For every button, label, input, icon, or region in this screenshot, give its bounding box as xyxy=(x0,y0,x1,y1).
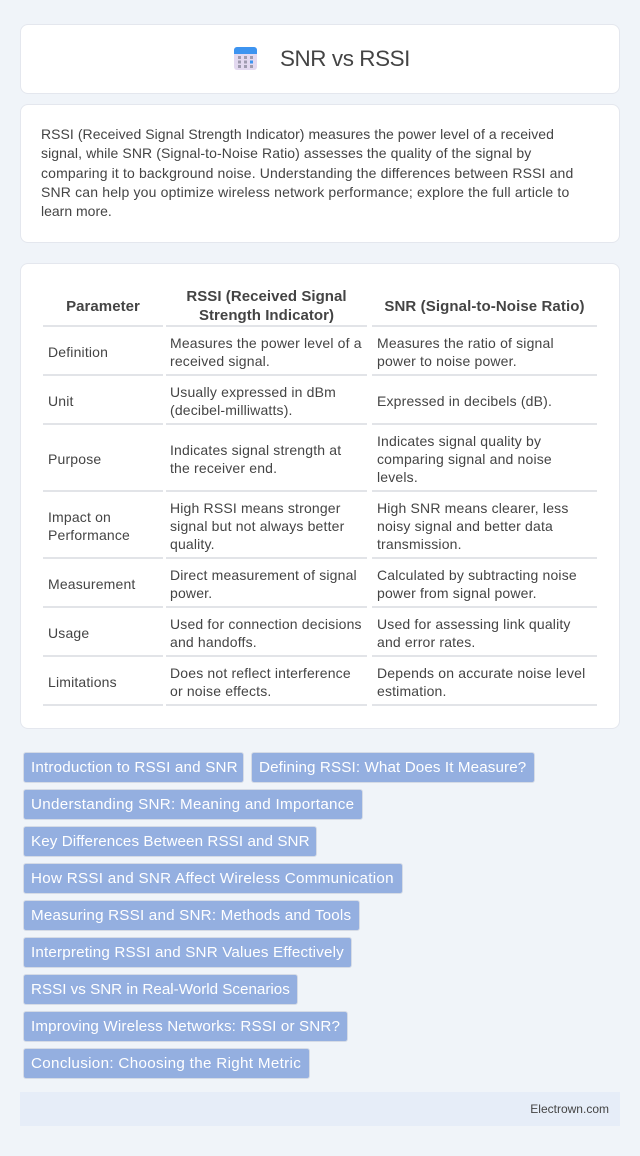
comparison table: Expressed in decibels (dB). xyxy=(377,393,552,409)
comparison table: Limitations xyxy=(48,674,117,690)
header card xyxy=(20,24,620,94)
comparison table: and handoffs. xyxy=(170,634,257,650)
comparison table: High SNR means clearer, less xyxy=(377,500,568,516)
tag: interpreting: Interpreting RSSI and SNR Values Effectively xyxy=(31,944,344,961)
comparison table: Definition xyxy=(48,344,108,360)
intro text: signal, while SNR (Signal-to-Noise Ratio) assesses the quality of the signal by xyxy=(41,145,531,161)
tag: interpreting xyxy=(23,937,352,968)
comparison table: Measures the power level of a xyxy=(170,335,362,351)
intro text xyxy=(41,126,573,219)
comparison table: noisy signal and better data xyxy=(377,518,553,534)
comparison table: SNR (Signal-to-Noise Ratio) xyxy=(384,298,585,315)
comparison table: Used for connection decisions xyxy=(170,616,362,632)
comparison table: Strength Indicator) xyxy=(199,307,334,324)
intro text: SNR can help you optimize wireless network performance; explore the full article to xyxy=(41,184,569,200)
tag: key differences: Key Differences Between RSSI and SNR xyxy=(31,833,310,850)
icon: calendar xyxy=(234,47,257,70)
comparison table: power. xyxy=(170,585,212,601)
tag: measuring xyxy=(23,900,360,931)
tag: improving xyxy=(23,1011,348,1042)
tag: improving: Improving Wireless Networks: RSSI or SNR? xyxy=(31,1018,340,1035)
comparison table: Measures the ratio of signal xyxy=(377,335,554,351)
comparison table: Purpose xyxy=(48,451,101,467)
comparison table: and error rates. xyxy=(377,634,475,650)
comparison table: or noise effects. xyxy=(170,683,271,699)
comparison table: Indicates signal quality by xyxy=(377,433,541,449)
tag: defining RSSI: Defining RSSI: What Does It Measure? xyxy=(259,759,526,776)
comparison table: Unit xyxy=(48,393,74,409)
comparison table: Depends on accurate noise level xyxy=(377,665,585,681)
comparison table: Direct measurement of signal xyxy=(170,567,357,583)
comparison table: estimation. xyxy=(377,683,447,699)
footer credit: Electrown.com xyxy=(530,1102,609,1116)
comparison table: Usage xyxy=(48,625,89,641)
tag: wireless communication: How RSSI and SNR Affect Wireless Communication xyxy=(31,870,394,887)
comparison table: Impact on xyxy=(48,509,111,525)
comparison table: Does not reflect interference xyxy=(170,665,351,681)
table card xyxy=(20,263,620,729)
comparison table: transmission. xyxy=(377,536,462,552)
tag: understanding SNR: Understanding SNR: Meaning and Importance xyxy=(31,796,354,813)
comparison table: Measurement xyxy=(48,576,135,592)
comparison table: Used for assessing link quality xyxy=(377,616,571,632)
comparison table xyxy=(43,288,597,706)
comparison table: (decibel-milliwatts). xyxy=(170,402,293,418)
tag: understanding SNR xyxy=(23,789,363,820)
comparison table: power to noise power. xyxy=(377,353,517,369)
comparison table: the receiver end. xyxy=(170,460,277,476)
footer bar xyxy=(20,1092,620,1126)
tag: conclusion: Conclusion: Choosing the Right Metric xyxy=(31,1055,301,1072)
intro card xyxy=(20,104,620,243)
comparison table: Parameter xyxy=(66,298,140,315)
comparison table: received signal. xyxy=(170,353,270,369)
tag: real-world: RSSI vs SNR in Real-World Scenarios xyxy=(31,981,290,998)
comparison table: Usually expressed in dBm xyxy=(170,384,336,400)
tag: introduction: Introduction to RSSI and SNR xyxy=(31,759,238,776)
comparison table: comparing signal and noise xyxy=(377,451,552,467)
comparison table: Calculated by subtracting noise xyxy=(377,567,577,583)
comparison table: RSSI (Received Signal xyxy=(186,288,347,305)
tag: key differences xyxy=(23,826,317,857)
comparison table: High RSSI means stronger xyxy=(170,500,341,516)
tag: conclusion xyxy=(23,1048,310,1079)
tag: defining RSSI xyxy=(251,752,535,783)
tag: measuring: Measuring RSSI and SNR: Methods and Tools xyxy=(31,907,351,924)
tag: introduction xyxy=(23,752,244,783)
intro text: RSSI (Received Signal Strength Indicator) measures the power level of a received xyxy=(41,126,554,142)
comparison table: quality. xyxy=(170,536,215,552)
intro text: comparing it to background noise. Understanding the differences between RSSI and xyxy=(41,165,573,181)
comparison table: Indicates signal strength at xyxy=(170,442,341,458)
tag: real-world xyxy=(23,974,298,1005)
comparison table: Performance xyxy=(48,527,130,543)
tag: wireless communication xyxy=(23,863,403,894)
intro text: learn more. xyxy=(41,203,112,219)
comparison table: levels. xyxy=(377,469,418,485)
comparison table: signal but not always better xyxy=(170,518,344,534)
title: SNR vs RSSI xyxy=(280,46,410,71)
comparison table: power from signal power. xyxy=(377,585,537,601)
